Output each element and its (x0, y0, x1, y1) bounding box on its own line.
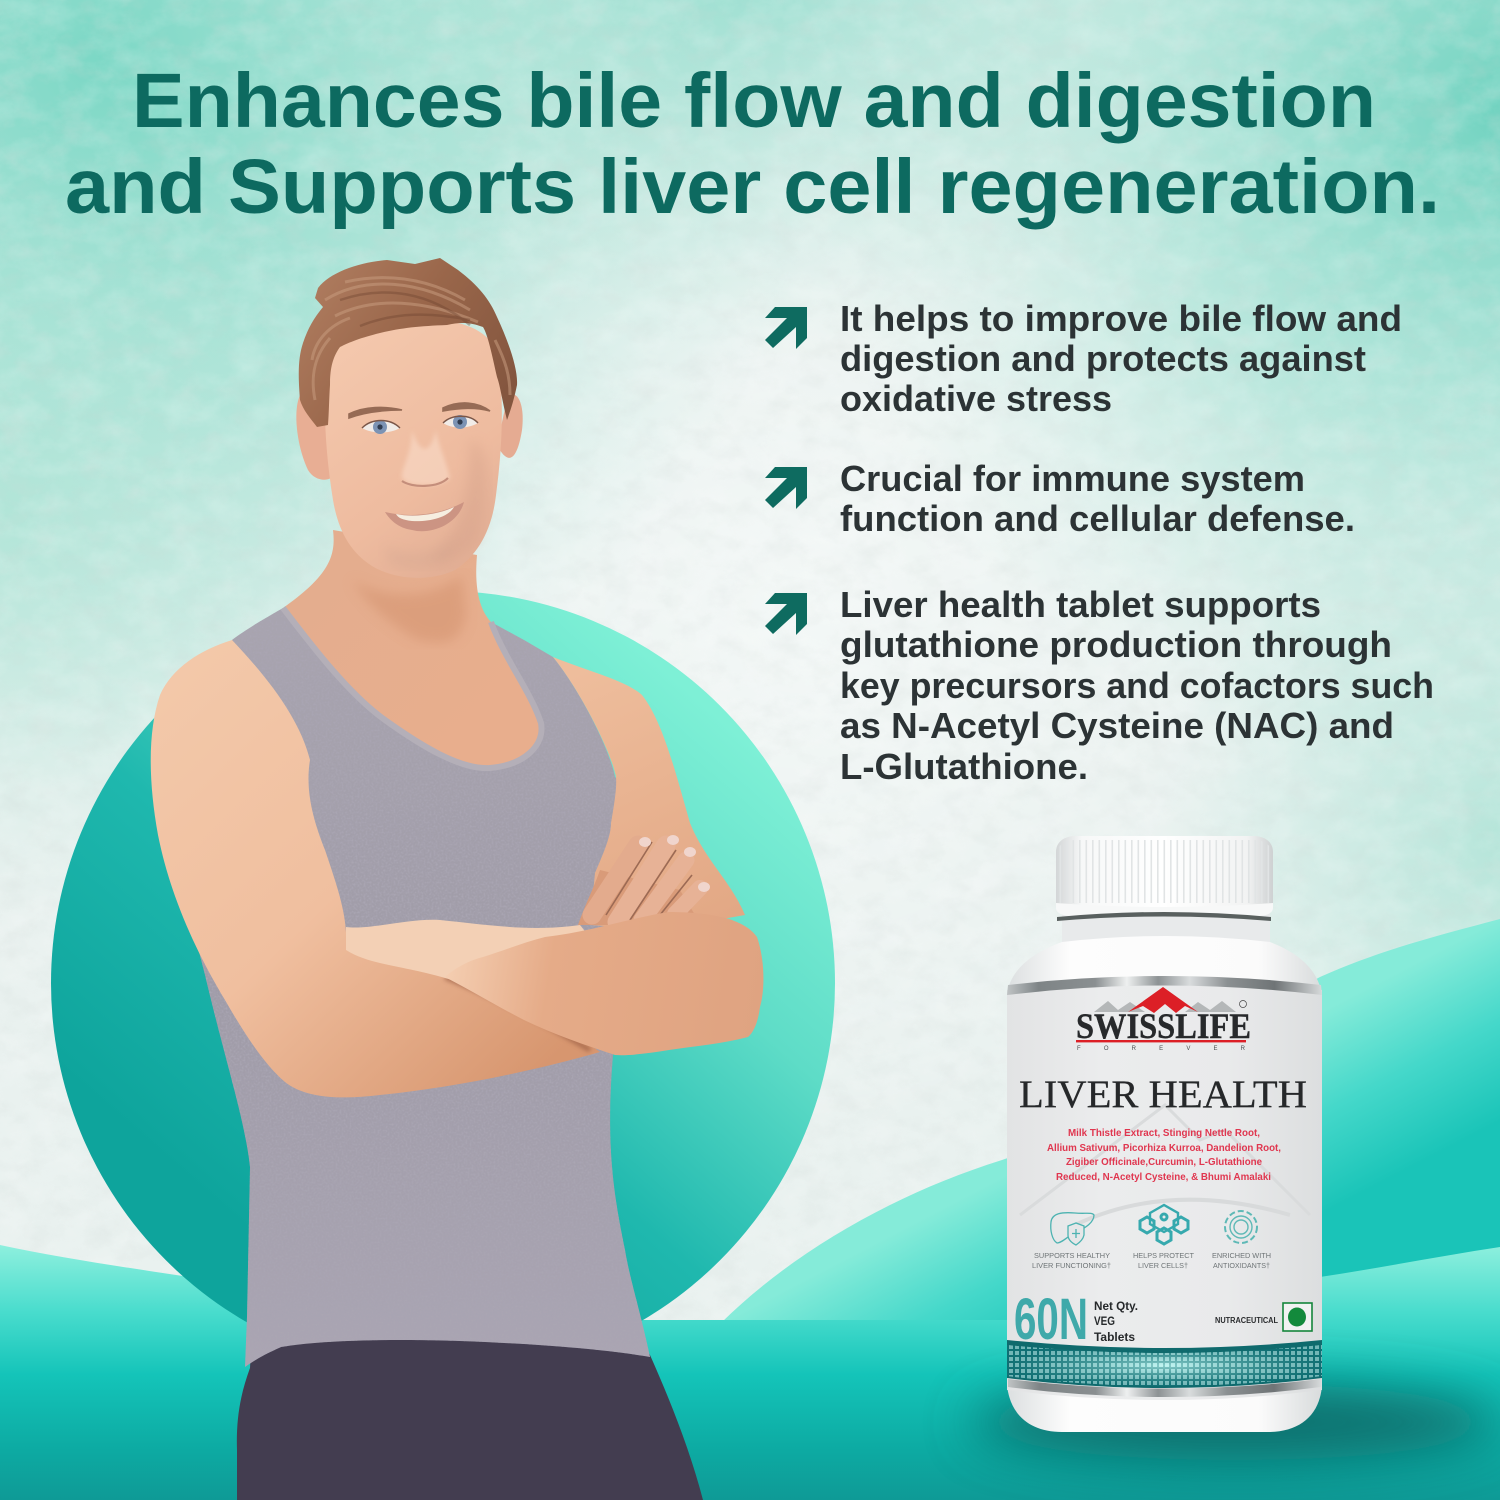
right eyebrow (443, 403, 490, 411)
icon captions: LIVER FUNCTIONING† (1032, 1261, 1111, 1270)
ingredients: Milk Thistle Extract, Stinging Nettle Root, (1068, 1127, 1260, 1139)
mouth (385, 502, 464, 531)
bullet icon: arrow 2 (765, 467, 807, 509)
neck and chest (283, 530, 542, 768)
ingredients (1047, 1127, 1281, 1183)
quantity note: Tablets (1094, 1330, 1135, 1344)
nose (402, 430, 450, 486)
stubble shadow (385, 535, 455, 568)
teal circle (51, 591, 835, 1375)
bullet text 2 (840, 458, 1355, 539)
icon captions: ENRICHED WITH (1212, 1251, 1271, 1260)
face (325, 320, 502, 578)
collar trim (283, 608, 542, 768)
bullet text 1: oxidative stress (840, 378, 1112, 419)
bottle body (1007, 936, 1322, 1432)
left ear (296, 392, 334, 480)
right ear (497, 394, 523, 458)
icon: hexagon cells (1140, 1205, 1188, 1244)
ingredients: Zigiber Officinale,Curcumin, L-Glutathione (1066, 1156, 1262, 1168)
quantity note: Net Qty. (1094, 1299, 1138, 1313)
product bottle (1007, 836, 1322, 1432)
cap (1056, 836, 1273, 916)
shorts (237, 1325, 703, 1500)
title (65, 58, 1440, 230)
folded forearm (445, 912, 763, 1055)
ingredients: Reduced, N-Acetyl Cysteine, & Bhumi Amalaki (1056, 1171, 1271, 1183)
quantity: 60N (1014, 1287, 1088, 1352)
right eye (443, 415, 478, 429)
icon captions: HELPS PROTECT (1133, 1251, 1194, 1260)
bullet text 1: It helps to improve bile flow and (840, 298, 1402, 339)
icon: antioxidant ring (1225, 1211, 1257, 1243)
icon captions: LIVER CELLS† (1138, 1261, 1188, 1270)
top silver band (1007, 976, 1322, 995)
dotted band (1007, 1340, 1322, 1388)
faint mountain watermark (1020, 1105, 1310, 1215)
ingredients: Allium Sativum, Picorhiza Kurroa, Dandelion Root, (1047, 1142, 1281, 1154)
logo: SWISSLIFE (1076, 1006, 1251, 1046)
left eye (362, 420, 400, 434)
background wave: front ground (0, 1245, 1500, 1500)
bottle neck (1062, 912, 1270, 950)
product name: LIVER HEALTH (1019, 1073, 1307, 1116)
tucked hand and fingers (346, 835, 710, 985)
title: and Supports liver cell regeneration. (65, 144, 1440, 230)
bullet icon: arrow 3 (765, 593, 807, 635)
bullet text 3: key precursors and cofactors such (840, 665, 1434, 706)
logo: F O R E V E R (1077, 1046, 1246, 1052)
title: Enhances bile flow and digestion (132, 58, 1376, 144)
neck ring (1057, 912, 1271, 921)
left eyebrow (349, 407, 402, 418)
icon captions: SUPPORTS HEALTHY (1034, 1251, 1110, 1260)
hair strands (312, 278, 510, 400)
bullet text 3 (840, 584, 1434, 787)
upper arm and forearm (left in picture) (151, 640, 600, 1097)
icon captions: ANTIOXIDANTS† (1213, 1261, 1270, 1270)
faint hill (1075, 1200, 1290, 1225)
bullet text 1 (840, 298, 1402, 419)
hair (299, 258, 517, 427)
icon captions (1032, 1251, 1271, 1270)
bullet text 2: function and cellular defense. (840, 498, 1355, 539)
bullet icon: arrow 1 (765, 307, 807, 349)
logo (1076, 987, 1251, 1052)
upper arm (right in picture) (553, 657, 745, 930)
veg mark (1283, 1303, 1312, 1331)
label (1007, 970, 1322, 1410)
bullet text 3: L-Glutathione. (840, 746, 1088, 787)
nutraceutical label: NUTRACEUTICAL (1215, 1316, 1278, 1325)
bullet text 2: Crucial for immune system (840, 458, 1305, 499)
quantity note: VEG (1094, 1314, 1115, 1328)
background wave: back hill (722, 919, 1500, 1500)
bullet text 1: digestion and protects against (840, 338, 1366, 379)
icon: liver (1051, 1213, 1094, 1245)
bullet text 3: glutathione production through (840, 624, 1392, 665)
neck shadow (352, 575, 466, 642)
bullet text 3: Liver health tablet supports (840, 584, 1321, 625)
tank top (160, 608, 650, 1367)
arm crease (445, 977, 590, 1050)
cheek shading (430, 440, 487, 563)
man photo illustration (151, 258, 763, 1500)
bottle shadow (970, 1384, 1500, 1460)
bottom silver band (1008, 1379, 1321, 1397)
quantity note (1094, 1299, 1138, 1344)
bullet text 3: as N-Acetyl Cysteine (NAC) and (840, 705, 1394, 746)
